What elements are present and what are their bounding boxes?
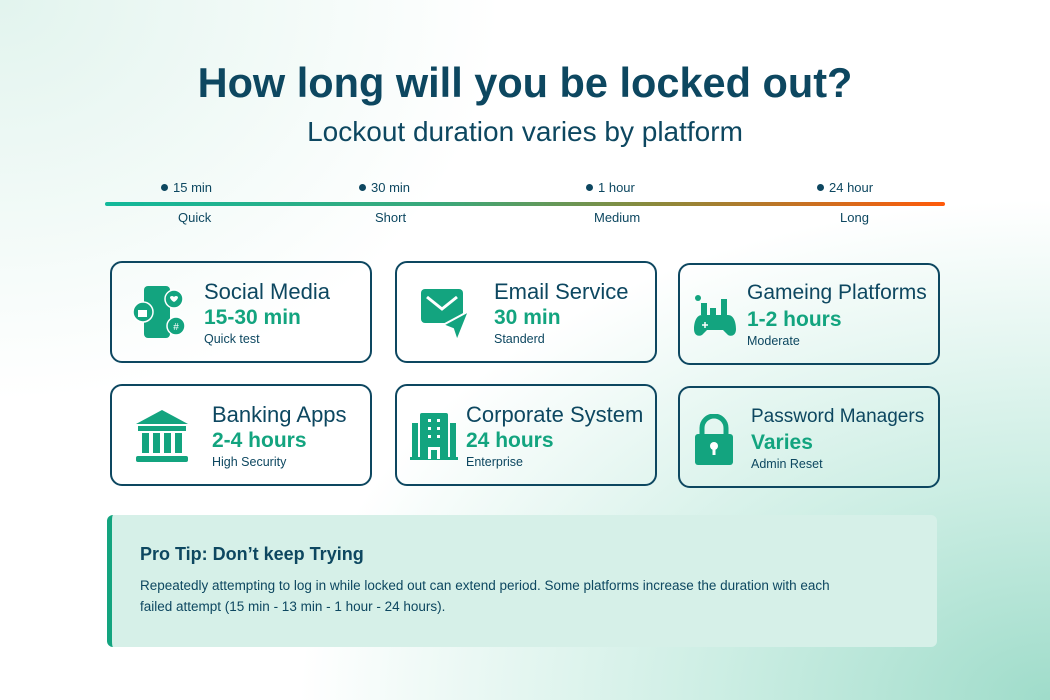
tip text: failed attempt (15 min - 13 min - 1 hour - 24 hours).: [140, 599, 445, 614]
tip text: [140, 578, 830, 614]
value: 15-30 min: [204, 306, 301, 329]
title: How long will you be locked out?: [198, 59, 852, 106]
icon: email: [421, 289, 467, 338]
title: Password Managers: [751, 406, 924, 427]
card: banking: [110, 384, 372, 486]
title: Social Media: [204, 279, 330, 304]
icon: social phone: #: [173, 322, 179, 333]
title: Gameing Platforms: [747, 281, 927, 304]
icon: padlock: [695, 414, 733, 465]
subtext: Moderate: [747, 334, 800, 348]
subtitle: Lockout duration varies by platform: [307, 116, 743, 147]
timeline: [105, 180, 945, 225]
marker 1 hour: 1 hour: [598, 180, 635, 195]
value: 2-4 hours: [212, 429, 307, 452]
icon: building: [410, 413, 458, 460]
value: 24 hours: [466, 429, 554, 452]
subtext: High Security: [212, 455, 286, 469]
title: Corporate System: [466, 402, 643, 427]
value: 1-2 hours: [747, 308, 842, 331]
subtext: Quick test: [204, 332, 260, 346]
subtext: Standerd: [494, 332, 545, 346]
value: 30 min: [494, 306, 561, 329]
card: corporate: [395, 384, 657, 486]
label short: Short: [375, 210, 406, 225]
tip heading: Pro Tip: Don’t keep Trying: [140, 544, 364, 564]
subtext: Admin Reset: [751, 457, 823, 471]
label medium: Medium: [594, 210, 640, 225]
marker 15 min: 15 min: [173, 180, 212, 195]
title: Banking Apps: [212, 402, 347, 427]
card: social media: [110, 261, 372, 363]
marker 30 min: 30 min: [371, 180, 410, 195]
title: Email Service: [494, 279, 628, 304]
value: Varies: [751, 431, 813, 454]
card: email: [395, 261, 657, 363]
icon: gamepad: [694, 295, 736, 336]
card: gaming: [678, 263, 940, 365]
tip text: Repeatedly attempting to log in while locked out can extend period. Some platforms increase the duration with each: [140, 578, 830, 593]
timeline bar: [105, 202, 945, 206]
card: password managers: [678, 386, 940, 488]
label quick: Quick: [178, 210, 211, 225]
callout: pro tip: [107, 515, 937, 647]
icon: social phone: [134, 286, 184, 338]
icon: bank: [136, 410, 188, 462]
subtext: Enterprise: [466, 455, 523, 469]
label long: Long: [840, 210, 869, 225]
marker 24 hour: 24 hour: [829, 180, 873, 195]
